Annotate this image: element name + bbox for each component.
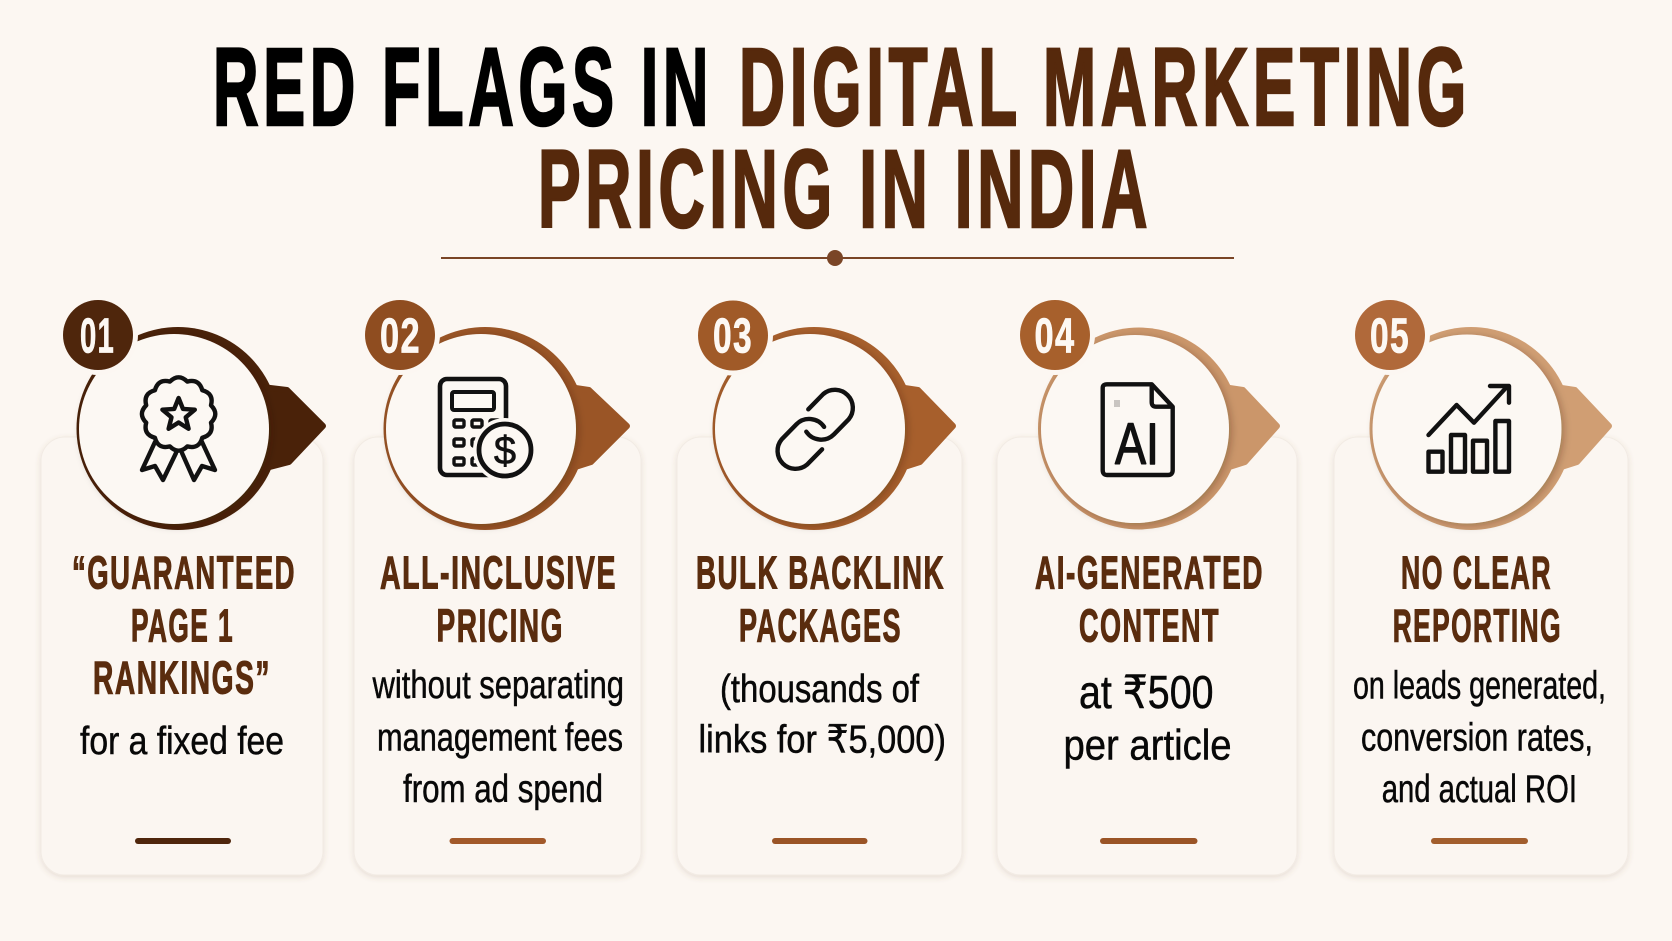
- title divider: [441, 250, 1234, 266]
- heading: PAGE 1: [131, 599, 234, 651]
- body text: [698, 668, 946, 762]
- icon: award rosette: [142, 377, 215, 480]
- heading: CONTENT: [1079, 599, 1220, 651]
- number badge 02: 02: [380, 310, 421, 364]
- circle holder with pointer: [76, 327, 323, 530]
- circle holder with pointer: [712, 327, 953, 530]
- panel: bulk backlink packages: [677, 296, 962, 875]
- heading: “GUARANTEED: [72, 546, 296, 598]
- body text: [1353, 664, 1606, 811]
- number badge 01: 01: [80, 310, 115, 364]
- heading: [696, 546, 945, 651]
- body text: [1064, 666, 1232, 770]
- panel: ai-generated content: [997, 295, 1297, 875]
- heading: NO CLEAR: [1401, 546, 1552, 598]
- icon: growth chart: [1428, 386, 1509, 472]
- card background: [677, 437, 962, 875]
- heading: ALL-INCLUSIVE: [380, 546, 617, 598]
- card background: [41, 437, 323, 875]
- number badge 05: [1350, 295, 1430, 375]
- circle holder with pointer: [1370, 327, 1609, 530]
- heading: PRICING: [436, 599, 564, 651]
- accent bar: [772, 838, 868, 844]
- title: PRICING IN INDIA: [538, 128, 1152, 251]
- title: [213, 26, 1471, 251]
- number badge 04: 04: [1034, 310, 1076, 364]
- accent bar: [450, 838, 546, 844]
- circle holder with pointer: [1038, 328, 1277, 530]
- body text: for a fixed fee: [80, 720, 284, 763]
- number badge 04: [1015, 295, 1095, 375]
- heading: BULK BACKLINK: [696, 546, 945, 598]
- body text: management fees: [377, 716, 623, 760]
- accent bar: [1100, 838, 1198, 844]
- heading: AI-GENERATED: [1035, 546, 1264, 598]
- icon: ai document: [1103, 384, 1173, 477]
- panel: all-inclusive pricing: [354, 295, 641, 875]
- body text: [372, 664, 624, 811]
- body text: conversion rates,: [1361, 716, 1593, 760]
- number badge 05: 05: [1370, 310, 1410, 364]
- accent bar: [135, 838, 231, 844]
- body text: without separating: [372, 664, 624, 707]
- number badge 03: 03: [713, 310, 753, 364]
- body text: from ad spend: [403, 768, 603, 811]
- accent bar: [1431, 838, 1528, 844]
- heading: PACKAGES: [739, 599, 902, 651]
- number badge 02: [360, 295, 440, 375]
- icon: calculator with dollar coin: $: [494, 429, 516, 473]
- number badge 01: [58, 295, 138, 375]
- title: RED FLAGS IN: [213, 26, 713, 149]
- card background: [997, 437, 1297, 875]
- number badge 03: [693, 296, 773, 376]
- body text: per article: [1064, 722, 1232, 770]
- body text: links for ₹5,000): [698, 718, 946, 762]
- body text: and actual ROI: [1382, 768, 1577, 811]
- icon: chain link: [778, 390, 853, 469]
- card background: [1334, 437, 1628, 875]
- heading: [1393, 546, 1562, 651]
- heading: RANKINGS”: [93, 651, 271, 703]
- circle holder with pointer: [384, 327, 627, 530]
- heading: [380, 546, 617, 651]
- heading: [1035, 546, 1264, 651]
- panel: no clear reporting: [1334, 295, 1628, 875]
- icon: ai document: AI: [1115, 412, 1159, 477]
- heading: [72, 546, 296, 703]
- card background: [354, 437, 641, 875]
- icon: calculator with dollar coin: [440, 379, 537, 482]
- body text: (thousands of: [720, 668, 919, 711]
- body text: at ₹500: [1079, 666, 1214, 718]
- panel: guaranteed page 1 rankings: [41, 295, 323, 875]
